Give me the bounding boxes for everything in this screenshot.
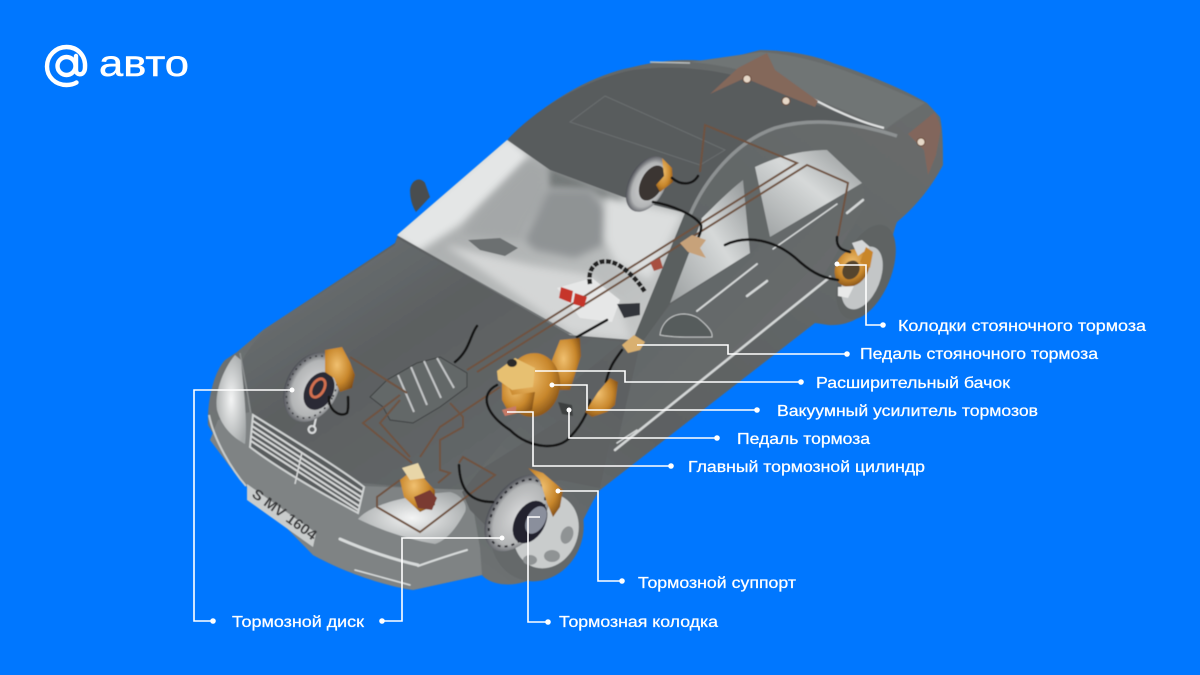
roof edge to side	[690, 122, 897, 215]
front wheel rim	[503, 484, 589, 578]
side mirror right	[660, 314, 712, 337]
logo wordmark: авто	[99, 43, 189, 84]
left bumper highlight	[209, 415, 246, 486]
front tire	[476, 465, 598, 595]
windshield	[397, 140, 685, 340]
left front brake disc	[272, 342, 352, 432]
taillight right	[908, 112, 941, 175]
engine cover	[370, 357, 467, 423]
red warning indicators	[559, 287, 587, 307]
leader lines	[194, 265, 883, 622]
label: тормозной суппорт: Тормозной суппорт	[638, 575, 797, 592]
leader: тормозной диск, левый	[194, 390, 292, 621]
black hoses	[329, 176, 850, 502]
leader: вакуумный усилитель	[552, 385, 757, 410]
leader: тормозной суппорт	[558, 491, 622, 581]
door panels	[618, 185, 865, 440]
roof	[508, 68, 885, 214]
abs unit	[400, 463, 437, 512]
label: тормозной диск: Тормозной диск	[232, 614, 365, 631]
front brake disc	[471, 463, 563, 563]
left front caliper	[325, 347, 355, 392]
master cylinder	[497, 358, 535, 416]
grille	[250, 415, 364, 513]
front fascia	[210, 412, 482, 590]
pedal bracket	[558, 402, 573, 416]
windshield bright band	[390, 135, 530, 252]
parking brake pedal	[622, 335, 645, 353]
rear deck highlight	[785, 84, 884, 128]
leader: педаль стояночного тормоза	[637, 345, 847, 354]
leader: тормозная колодка	[528, 517, 548, 622]
sunroof outline	[570, 96, 725, 165]
label: вакуумный усилитель тормозов: Вакуумный усилитель тормозов	[777, 403, 1038, 420]
rear deck	[690, 52, 925, 130]
label: педаль тормоза: Педаль тормоза	[737, 431, 870, 448]
leader dots	[210, 262, 886, 625]
leader: расширительный бачок	[535, 371, 801, 382]
hood	[240, 238, 622, 492]
car body silhouette	[208, 50, 943, 590]
parking brake lever	[680, 235, 706, 258]
front side window	[670, 180, 750, 303]
door panel seen through glass	[472, 160, 550, 238]
logo: @ авто	[47, 43, 189, 85]
license plate: S MV 1604	[249, 486, 320, 544]
rear brake lights knobs	[743, 75, 925, 146]
instrument box	[552, 338, 581, 390]
leader: тормозной диск, правый	[382, 538, 502, 621]
light area right of seats	[605, 197, 683, 280]
label: педаль стояночного тормоза: Педаль стояночного тормоза	[860, 346, 1098, 363]
steering wheel	[589, 261, 645, 292]
side mirror left	[410, 179, 430, 212]
rear side window	[755, 150, 862, 237]
leader: педаль тормоза	[569, 410, 717, 438]
dash stalk	[617, 303, 640, 318]
A pillar	[622, 213, 702, 345]
brake pedal	[585, 378, 618, 417]
car illustration	[208, 50, 943, 595]
icon: at sign	[47, 47, 85, 85]
leader: главный тормозной цилиндр	[507, 412, 671, 466]
roof seam highlight	[650, 62, 690, 63]
bumper highlights	[340, 539, 467, 585]
dashboard lighter	[445, 245, 630, 340]
red relay	[650, 258, 663, 271]
brake booster	[502, 350, 564, 420]
roofline shade in glass	[546, 168, 624, 203]
left headlight	[216, 355, 246, 444]
door handles and sills	[615, 200, 863, 450]
fender	[462, 420, 610, 530]
label: расширительный бачок: Расширительный бачок	[816, 375, 1011, 392]
taillight top	[710, 53, 818, 107]
rear rim right	[833, 241, 891, 315]
rear tire right	[824, 216, 908, 328]
brake lines	[350, 125, 848, 532]
right headlight	[358, 492, 466, 544]
footwell dark	[468, 238, 518, 256]
label: главный тормозной цилиндр: Главный тормозной цилиндр	[688, 459, 925, 476]
label: тормозная колодка: Тормозная колодка	[559, 614, 718, 631]
hood crease highlight	[240, 353, 251, 415]
dash panel	[557, 278, 620, 322]
rear right brake	[827, 240, 877, 298]
Mercedes star on hood	[309, 418, 316, 433]
windshield interior, soft-shaded	[390, 135, 683, 340]
cowl shade	[431, 254, 574, 336]
leader: колодки стояночного тормоза	[837, 265, 883, 325]
front caliper	[528, 468, 563, 517]
label: колодки стояночного тормоза: Колодки стояночного тормоза	[898, 318, 1146, 335]
rear left disc	[617, 149, 677, 219]
seats through glass	[525, 190, 605, 258]
